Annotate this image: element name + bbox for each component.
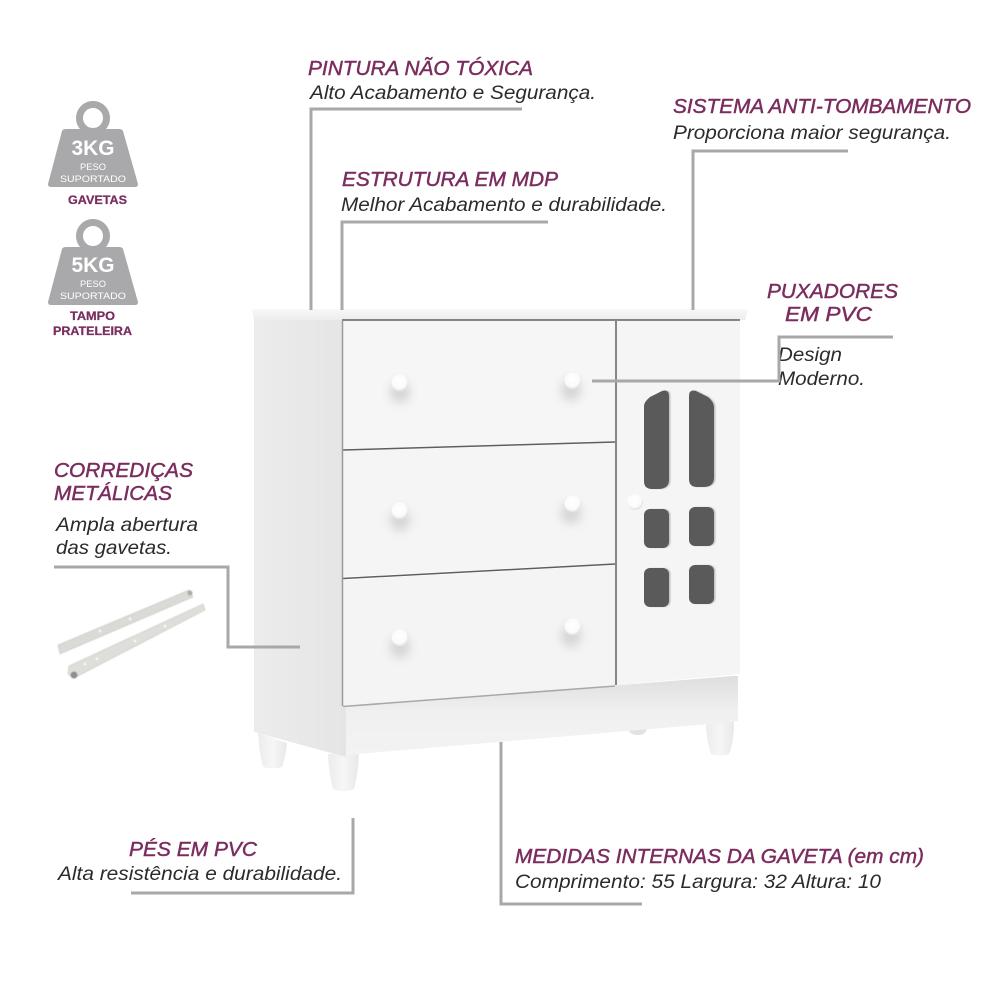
callout: sistema anti-tombamento: SISTEMA ANTI-TOMBAMENTO <box>673 96 971 118</box>
callout: sistema anti-tombamento: Proporciona maior segurança. <box>673 123 951 144</box>
label: prateleira: PRATELEIRA <box>53 324 132 338</box>
weight icon: 3KG: PESO <box>80 162 106 172</box>
label: tampo: TAMPO <box>70 309 115 323</box>
callout: puxadores em PVC: Moderno. <box>778 369 865 390</box>
callout: medidas internas da gaveta: MEDIDAS INTERNAS DA GAVETA (em cm) <box>515 846 924 868</box>
callout: medidas internas da gaveta <box>501 742 924 904</box>
callout: puxadores em PVC: PUXADORES <box>767 281 899 303</box>
dresser base plinth <box>346 676 738 755</box>
callout: pés em PVC: PÉS EM PVC <box>129 838 258 861</box>
callout: medidas internas da gaveta: Comprimento: 55 Largura: 32 Altura: 10 <box>515 872 881 893</box>
callout: estrutura em MDP <box>341 169 667 310</box>
weight icon: 5KG: 5KG <box>72 254 114 277</box>
callout: pés em PVC <box>57 818 353 893</box>
icon: metal drawer slides <box>58 590 205 678</box>
callout: corrediças metálicas: METÁLICAS <box>54 482 173 505</box>
dresser side panel <box>254 319 346 757</box>
callout: puxadores em PVC: EM PVC <box>785 304 873 326</box>
callout: corrediças metálicas: Ampla abertura <box>55 515 198 536</box>
drawer 2 <box>343 443 615 577</box>
callout: estrutura em MDP: Melhor Acabamento e durabilidade. <box>341 195 667 216</box>
weight icon: 5KG: PESO <box>80 279 106 289</box>
callout: pintura não tóxica: Alto Acabamento e Segurança. <box>309 83 596 104</box>
callout: corrediças metálicas <box>54 460 300 647</box>
back left foot <box>258 733 287 768</box>
weight icon: 5KG: SUPORTADO <box>60 291 126 301</box>
furniture: white dresser <box>252 309 748 791</box>
callout: pintura não tóxica: PINTURA NÃO TÓXICA <box>308 56 533 80</box>
callout: pés em PVC: Alta resistência e durabilidade. <box>57 864 342 885</box>
top board <box>252 309 748 320</box>
weight icon: 3KG: SUPORTADO <box>60 174 126 184</box>
drawer 1 <box>343 321 615 449</box>
door <box>617 321 740 685</box>
weight icon: 5KG <box>48 222 138 305</box>
drawer knobs <box>392 372 643 646</box>
callout: sistema anti-tombamento <box>673 96 971 310</box>
weight icon: 3KG <box>48 104 138 187</box>
weight icon: 3KG: 3KG <box>72 137 114 160</box>
knob shadows <box>390 379 581 658</box>
callout: estrutura em MDP: ESTRUTURA EM MDP <box>342 169 559 191</box>
callout: corrediças metálicas: das gavetas. <box>56 538 172 559</box>
drawer 3 <box>343 565 615 706</box>
front foot <box>328 754 359 791</box>
hidden center foot <box>628 728 647 735</box>
callout: corrediças metálicas: CORREDIÇAS <box>54 460 194 482</box>
label: gavetas: GAVETAS <box>68 193 127 207</box>
callout: puxadores em PVC <box>592 281 899 390</box>
gaps between fronts <box>342 320 740 706</box>
callout: puxadores em PVC: Design <box>778 345 842 366</box>
back right foot <box>706 722 734 756</box>
callout: pintura não tóxica <box>308 56 596 310</box>
door window openings <box>644 391 714 607</box>
